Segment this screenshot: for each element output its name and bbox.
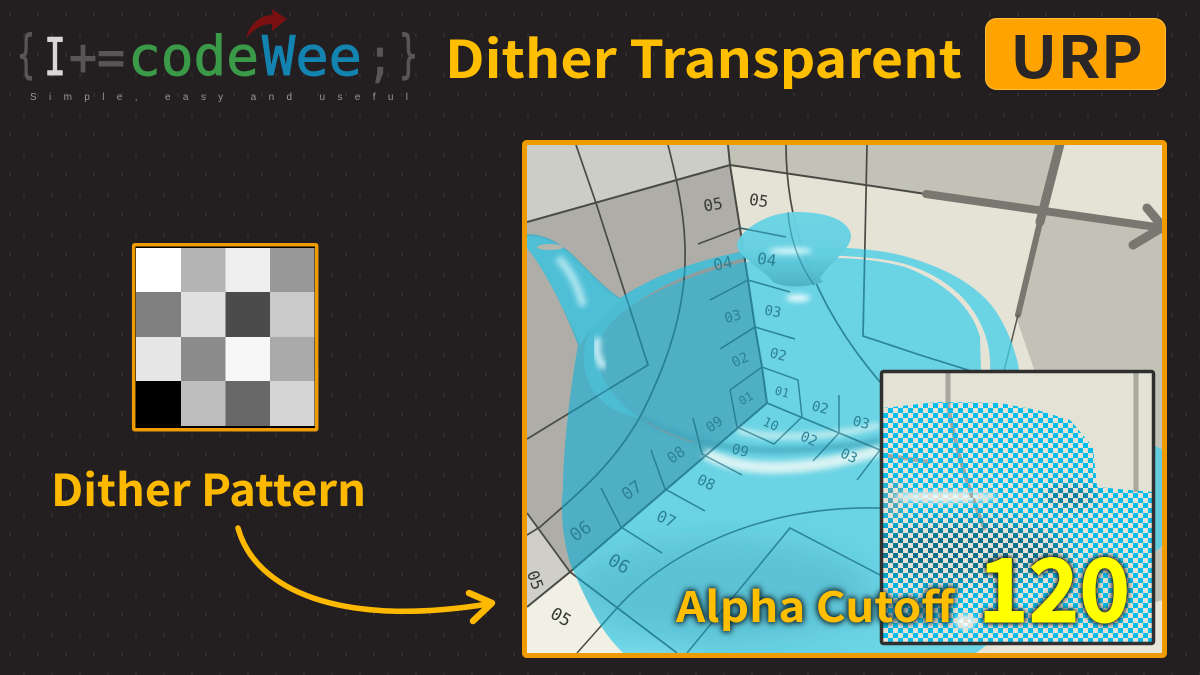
- URP badge: URP: [1010, 11, 1143, 95]
- numbers on teapot: 02: [798, 429, 820, 450]
- wall numbers: [523, 190, 770, 631]
- title: Dither Transparent: [445, 18, 962, 93]
- numbers on teapot: [566, 249, 871, 579]
- gridlines seen through teapot: [562, 249, 970, 653]
- alpha cutoff label: Alpha Cutoff: [675, 574, 956, 635]
- numbers on teapot: 01: [736, 389, 756, 408]
- alpha cutoff value: 120: [978, 521, 1130, 648]
- logo: codeWee: code: [128, 25, 259, 88]
- numbers on teapot: 07: [654, 506, 679, 532]
- numbers on teapot: 04: [756, 249, 778, 270]
- logo: codeWee: {: [17, 25, 35, 85]
- logo: codeWee: }: [399, 25, 418, 85]
- numbers on teapot: 02: [729, 350, 751, 371]
- teapot rim: [584, 252, 745, 418]
- numbers on teapot: 10: [760, 415, 781, 435]
- icon: logo red arrow: [246, 9, 287, 38]
- numbers on teapot: 06: [566, 517, 596, 546]
- dither pattern label: Dither Pattern: [51, 455, 366, 519]
- URP badge: [986, 11, 1166, 95]
- teapot body: [527, 234, 1163, 653]
- spout: [527, 236, 620, 345]
- logo: codeWee: [17, 9, 418, 103]
- panel: zoomed dither inset: [860, 370, 1156, 646]
- numbers on teapot: 03: [763, 303, 782, 321]
- panel: teapot render: [523, 140, 1164, 675]
- numbers on teapot: 07: [618, 477, 646, 505]
- numbers on teapot: 03: [723, 307, 743, 327]
- teapot shading: [527, 234, 880, 653]
- wall numbers: 05: [702, 194, 724, 216]
- numbers on teapot: 03: [838, 446, 860, 467]
- dithered teapot pixels: [883, 402, 1152, 642]
- wall and floor tiles: [527, 145, 1163, 653]
- logo: codeWee: I: [44, 28, 66, 88]
- logo: codeWee: +=: [69, 28, 125, 88]
- grid lines behind teapot: [527, 145, 1000, 653]
- dither pattern matrix: [134, 245, 317, 430]
- lid bottom highlight bands: [705, 450, 880, 468]
- numbers on teapot: 09: [703, 413, 726, 436]
- wall numbers: 05: [748, 190, 770, 211]
- numbers on teapot: 02: [768, 345, 788, 365]
- curved arrow: [238, 528, 492, 621]
- wall numbers: 05: [523, 568, 547, 592]
- teapot knob: [737, 212, 851, 302]
- numbers on teapot: 03: [851, 413, 871, 433]
- numbers on teapot: 06: [604, 550, 633, 579]
- numbers on teapot: 04: [711, 252, 734, 275]
- numbers on teapot: 08: [664, 442, 689, 467]
- thick axis cross and arrow: [926, 140, 1163, 375]
- numbers on teapot: 02: [810, 398, 830, 418]
- grid lines in inset: [883, 372, 1136, 530]
- logo tagline: Simple, easy and useful: [30, 92, 408, 103]
- numbers on teapot: 09: [730, 441, 750, 461]
- wall numbers: 05: [547, 604, 574, 631]
- logo: codeWee: ;: [368, 28, 392, 88]
- numbers on teapot: 08: [694, 470, 718, 494]
- frame of teapot panel: [524, 142, 1164, 656]
- logo: codeWee: Wee: [262, 25, 362, 88]
- numbers on teapot: 01: [773, 384, 791, 401]
